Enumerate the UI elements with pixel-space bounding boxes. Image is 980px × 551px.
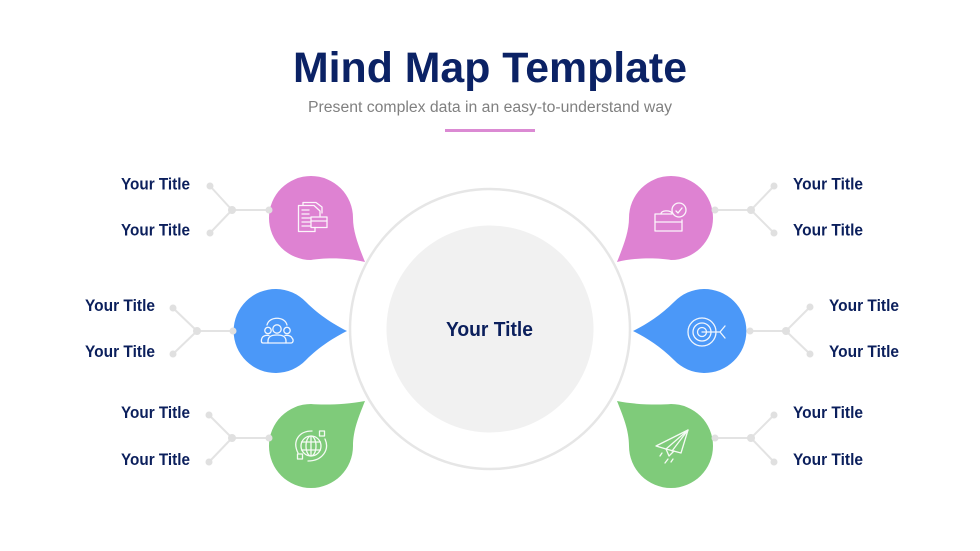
label: middle right 2: Your Title bbox=[829, 343, 899, 361]
label: bottom right 1: Your Title bbox=[793, 404, 863, 422]
connector: top right bbox=[712, 182, 778, 236]
icon: target with arrow bbox=[688, 318, 725, 346]
branch: middle left bbox=[85, 289, 347, 373]
icon: briefcase with clock bbox=[655, 203, 686, 231]
title underline bbox=[445, 129, 535, 132]
label: top right 1: Your Title bbox=[793, 176, 863, 194]
connector: middle left bbox=[170, 304, 236, 358]
label: middle left 1: Your Title bbox=[85, 297, 155, 315]
central hub bbox=[350, 189, 630, 469]
teardrop: top left bbox=[269, 176, 365, 262]
connector: top left bbox=[206, 182, 272, 236]
icon: people group bbox=[261, 318, 293, 343]
title: Mind Map Template bbox=[293, 44, 687, 92]
branch: bottom left bbox=[121, 401, 365, 488]
label: bottom right 2: Your Title bbox=[793, 451, 863, 469]
label: top left 2: Your Title bbox=[121, 222, 190, 240]
teardrop: bottom right bbox=[617, 401, 713, 488]
label: top right 2: Your Title bbox=[793, 222, 863, 240]
icon: documents and card bbox=[298, 202, 327, 232]
connector: middle right bbox=[746, 304, 814, 358]
connector: bottom left bbox=[206, 412, 272, 466]
branch: top right bbox=[617, 176, 863, 262]
central hub: Your Title bbox=[446, 319, 533, 341]
label: bottom left 2: Your Title bbox=[121, 451, 190, 469]
icon: paper plane bbox=[656, 430, 688, 463]
teardrop: middle left bbox=[234, 289, 347, 373]
branch: top left bbox=[121, 176, 365, 262]
label: top left 1: Your Title bbox=[121, 176, 190, 194]
branch: bottom right bbox=[617, 401, 863, 488]
label: middle right 1: Your Title bbox=[829, 297, 899, 315]
teardrop: middle right bbox=[633, 289, 746, 373]
connector: bottom right bbox=[712, 412, 778, 466]
label: middle left 2: Your Title bbox=[85, 343, 155, 361]
branch: middle right bbox=[633, 289, 899, 373]
subtitle: Present complex data in an easy-to-understand way bbox=[308, 99, 672, 116]
label: bottom left 1: Your Title bbox=[121, 404, 190, 422]
teardrop: top right bbox=[617, 176, 713, 262]
teardrop: bottom left bbox=[269, 401, 365, 488]
icon: globe with cycle bbox=[296, 431, 326, 461]
